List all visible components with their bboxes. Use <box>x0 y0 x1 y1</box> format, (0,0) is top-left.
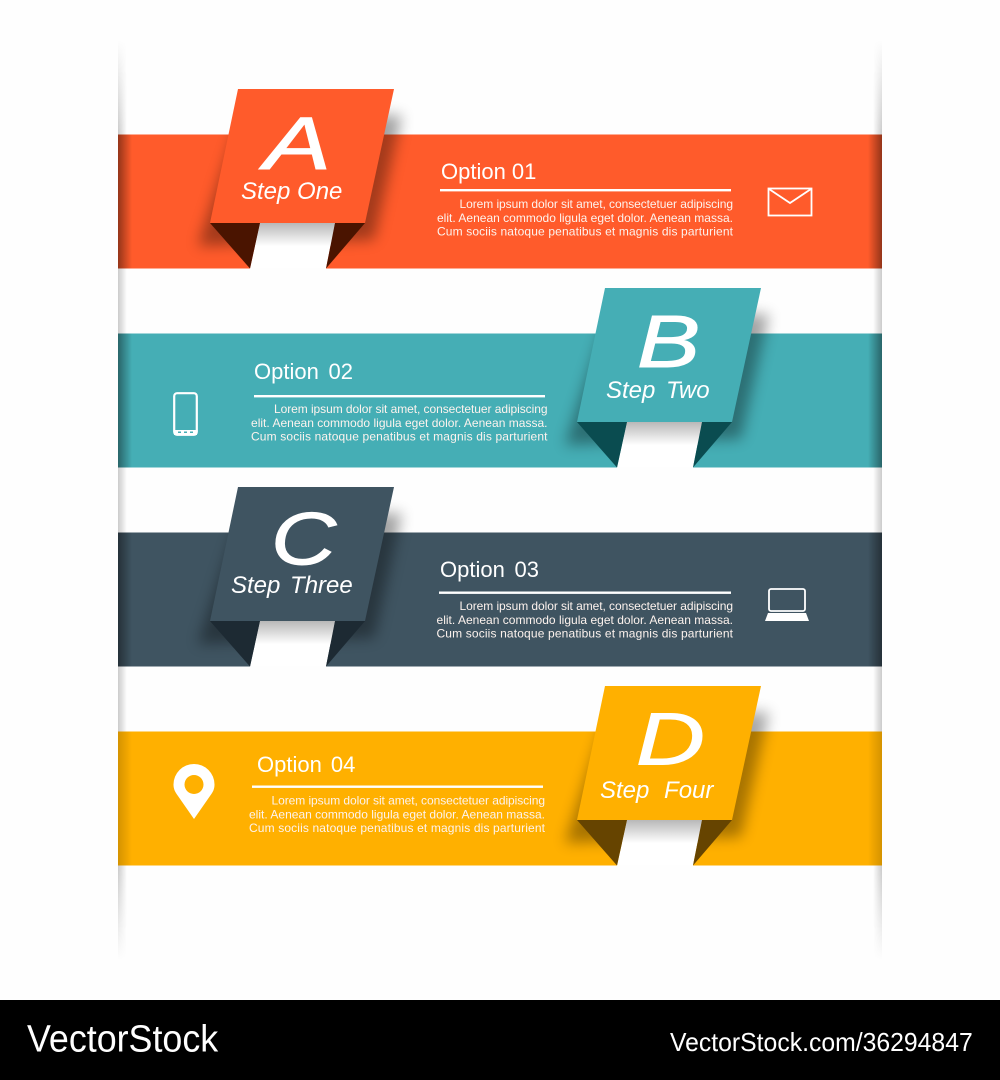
band C end shadows <box>118 532 882 666</box>
icon: smartphone <box>174 393 197 435</box>
option 03 text <box>436 557 734 640</box>
option 02 text: Option 02 <box>254 359 353 384</box>
page side shadows <box>118 40 882 960</box>
tag A <box>210 89 394 223</box>
footer bar <box>0 1000 1000 1080</box>
band D background <box>118 732 882 866</box>
option 01 text: Cum sociis natoque penatibus et magnis dis parturient <box>437 224 734 238</box>
tag A cast shadow <box>198 115 402 246</box>
letter C: C <box>271 498 338 581</box>
band B background <box>118 334 882 468</box>
step label: Step Three <box>231 572 353 599</box>
letter B: B <box>637 301 700 384</box>
option 03 text: elit. Aenean commodo ligula eget dolor. Aenean massa. <box>436 613 733 627</box>
tag D left fold <box>577 820 627 866</box>
step label: Step Four <box>600 777 714 804</box>
tag D cast shadow <box>565 712 769 843</box>
option 03 text: Cum sociis natoque penatibus et magnis dis parturient <box>436 626 734 640</box>
tag D strip shadow <box>622 820 702 843</box>
panel: band C <box>118 487 882 666</box>
tag A white strip <box>250 223 335 268</box>
tag B left fold <box>577 422 627 468</box>
option 02 text <box>251 359 548 444</box>
option 04 text: Option 04 <box>257 752 355 777</box>
tag B <box>577 288 761 422</box>
tag A left fold <box>210 223 260 268</box>
tag B right fold <box>693 422 732 468</box>
icon: envelope <box>768 188 812 216</box>
option 04 text: Lorem ipsum dolor sit amet, consectetuer adipiscing <box>272 794 545 808</box>
tag C strip shadow <box>255 621 335 644</box>
footer url: VectorStock.com/36294847 <box>670 1029 973 1057</box>
tag C <box>210 487 394 621</box>
band B end shadows <box>118 334 882 468</box>
band A background <box>118 134 882 268</box>
option 01 text <box>437 159 734 238</box>
tag B strip shadow <box>622 422 702 445</box>
tag C white strip <box>250 621 335 666</box>
letter D: D <box>636 699 705 781</box>
band A end shadows <box>118 134 882 268</box>
tag A right fold <box>326 223 365 268</box>
panel: band D <box>118 686 882 866</box>
panel: band A <box>118 89 882 268</box>
tag C right fold <box>326 621 365 666</box>
letter A: A <box>258 102 331 185</box>
option 02 text: Cum sociis natoque penatibus et magnis dis parturient <box>251 430 548 444</box>
tag D <box>577 686 761 820</box>
footer logo: VectorStock <box>27 1018 219 1060</box>
option 02 text: elit. Aenean commodo ligula eget dolor. Aenean massa. <box>251 416 548 430</box>
tag B white strip <box>617 422 702 468</box>
option 01 text: elit. Aenean commodo ligula eget dolor. Aenean massa. <box>437 211 733 225</box>
band C background <box>118 532 882 666</box>
tag A strip shadow <box>255 223 335 246</box>
panel: band B <box>118 288 882 468</box>
option 03 text: Lorem ipsum dolor sit amet, consectetuer adipiscing <box>460 599 733 613</box>
icon: location pin <box>173 764 214 819</box>
band D end shadows <box>118 732 882 866</box>
option 01 text: Option 01 <box>441 159 536 184</box>
tag C left fold <box>210 621 260 666</box>
step label: Step Two <box>606 377 710 404</box>
option 03 text: Option 03 <box>440 557 539 582</box>
tag B cast shadow <box>565 314 769 445</box>
option 04 text <box>249 752 546 835</box>
icon: laptop <box>765 589 809 621</box>
option 02 text: Lorem ipsum dolor sit amet, consectetuer adipiscing <box>274 402 548 416</box>
tag C cast shadow <box>198 513 402 644</box>
tag D white strip <box>617 820 702 866</box>
step label: Step One <box>241 178 342 205</box>
tag D right fold <box>693 820 732 866</box>
option 01 text: Lorem ipsum dolor sit amet, consectetuer adipiscing <box>460 197 733 211</box>
option 04 text: elit. Aenean commodo ligula eget dolor. Aenean massa. <box>249 808 545 822</box>
option 04 text: Cum sociis natoque penatibus et magnis dis parturient <box>249 821 546 835</box>
